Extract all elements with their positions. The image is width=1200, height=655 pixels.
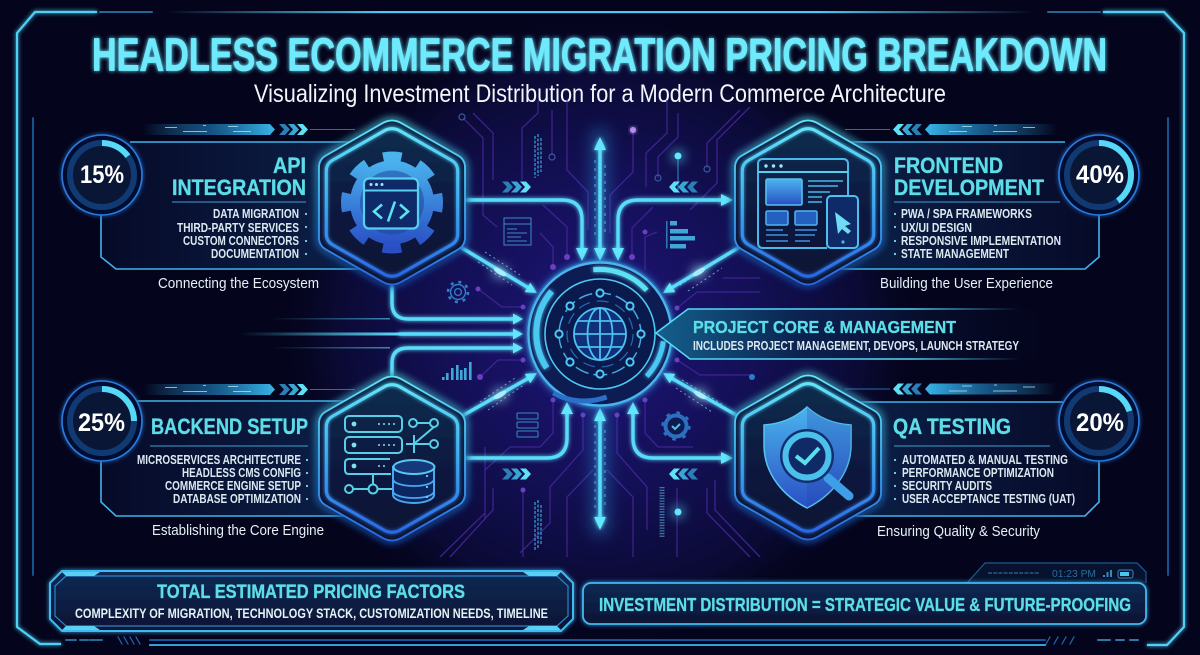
stat: 25% (62, 381, 142, 461)
list: backend items (137, 453, 308, 506)
box: total estimated pricing factors: COMPLEXITY OF MIGRATION, TECHNOLOGY STACK, CUSTOMIZATION NEEDS, TIMELINE (75, 605, 548, 621)
list: API items: DATA MIGRATION (213, 207, 299, 221)
panel frame frontend (840, 142, 1099, 269)
box: total estimated pricing factors: TOTAL ESTIMATED PRICING FACTORS (157, 581, 465, 603)
list: frontend items: PWA / SPA FRAMEWORKS (901, 207, 1032, 221)
central hub: globe network (526, 260, 674, 408)
panel: API integration (62, 120, 465, 292)
caption: backend: Establishing the Core Engine (152, 522, 324, 539)
panel: QA testing (735, 376, 1139, 540)
list: backend items: COMMERCE ENGINE SETUP (165, 479, 301, 493)
list: QA items: SECURITY AUDITS (902, 479, 992, 493)
icon: form rows (517, 413, 538, 437)
caption: API: Connecting the Ecosystem (158, 275, 319, 292)
list: frontend items: RESPONSIVE IMPLEMENTATION (901, 234, 1061, 248)
icon: small gear upper left (448, 282, 468, 302)
heading: Frontend Development: FRONTEND (894, 153, 1003, 178)
icon: code document (504, 218, 531, 245)
heading: API Integration: API (273, 153, 306, 178)
heading: API Integration: INTEGRATION (172, 175, 306, 200)
arrow: QA from hub (627, 402, 733, 464)
arrows: left horizontal trio (392, 287, 523, 375)
caption: QA: Ensuring Quality & Security (877, 523, 1040, 540)
panel frame backend (101, 401, 360, 516)
circuit background traces (440, 100, 760, 557)
list: API items: CUSTOM CONNECTORS (183, 234, 299, 248)
list: API items: DOCUMENTATION (211, 247, 299, 261)
panel frame API (101, 142, 360, 269)
panel: Backend setup (62, 376, 465, 540)
icon: hexagon web layout (735, 120, 881, 284)
icon: horizontal bars (666, 221, 695, 248)
box: total estimated pricing factors (50, 571, 573, 631)
chevrons centre (502, 182, 698, 480)
icon: hexagon gear with code window (319, 120, 465, 284)
list: backend items: MICROSERVICES ARCHITECTURE (137, 453, 301, 467)
callout: project core and management: INCLUDES PROJECT MANAGEMENT, DEVOPS, LAUNCH STRATEGY (693, 339, 1020, 353)
box: investment distribution (583, 583, 1146, 624)
heading: QA Testing: QA TESTING (893, 414, 1011, 439)
stat: 25%: 25% (78, 409, 125, 437)
list: frontend items (894, 207, 1061, 261)
sparkle accents on diagonals (478, 252, 722, 412)
list: frontend items: STATE MANAGEMENT (901, 247, 1009, 261)
stat: 40% (1059, 135, 1139, 215)
status bar readout (967, 563, 1146, 583)
heading: Backend Setup: BACKEND SETUP (151, 414, 308, 439)
stat: 20% (1059, 381, 1139, 461)
list: QA items: USER ACCEPTANCE TESTING (UAT) (902, 492, 1075, 506)
list: QA items: AUTOMATED & MANUAL TESTING (902, 453, 1068, 467)
icon: hexagon shield and magnifier (735, 376, 881, 540)
list: API items (177, 207, 307, 261)
caption: frontend: Building the User Experience (880, 275, 1053, 292)
status bar readout: 01:23 PM (1052, 568, 1096, 580)
panel frame QA (840, 402, 1099, 516)
icon: bar chart (442, 362, 472, 380)
small data streaks and mini icons (442, 134, 698, 550)
icon: battery (1118, 570, 1133, 578)
list: API items: THIRD-PARTY SERVICES (177, 221, 299, 235)
arrow: API to hub (465, 200, 588, 261)
list: QA items: PERFORMANCE OPTIMIZATION (902, 466, 1054, 480)
top accent: frontend (845, 124, 1057, 135)
stat: 15% (62, 135, 142, 215)
list: frontend items: UX/UI DESIGN (901, 221, 972, 235)
heading: API Integration (172, 153, 306, 200)
arrow: backend to hub (465, 402, 573, 458)
list: QA items (894, 453, 1075, 506)
stat: 40%: 40% (1076, 161, 1124, 189)
top accent: backend (143, 384, 355, 395)
icon: small gear check (663, 413, 689, 439)
connectors and arrows into hub (240, 130, 738, 535)
panel: Frontend development (735, 120, 1139, 292)
icon: hexagon servers and database (319, 376, 465, 540)
arrow: vertical double top (594, 137, 606, 261)
arrow: vertical double bottom (594, 408, 606, 530)
list: backend items: DATABASE OPTIMIZATION (173, 492, 301, 506)
subtitle: Visualizing Investment Distribution for a Modern Commerce Architecture (254, 80, 946, 108)
list: backend items: HEADLESS CMS CONFIG (182, 466, 301, 480)
top accent: API (143, 124, 355, 135)
stat: 15%: 15% (80, 161, 124, 189)
heading: Frontend Development: DEVELOPMENT (894, 175, 1044, 200)
stat: 20%: 20% (1076, 409, 1124, 437)
arrows: diagonal four (462, 248, 738, 416)
icon: signal bars (1103, 570, 1112, 577)
top accent: QA (845, 384, 1057, 394)
heading: Frontend Development (894, 153, 1044, 200)
arrow: hub to frontend (612, 194, 733, 261)
callout: project core and management: PROJECT CORE & MANAGEMENT (693, 317, 956, 337)
callout: project core and management (656, 309, 1060, 359)
